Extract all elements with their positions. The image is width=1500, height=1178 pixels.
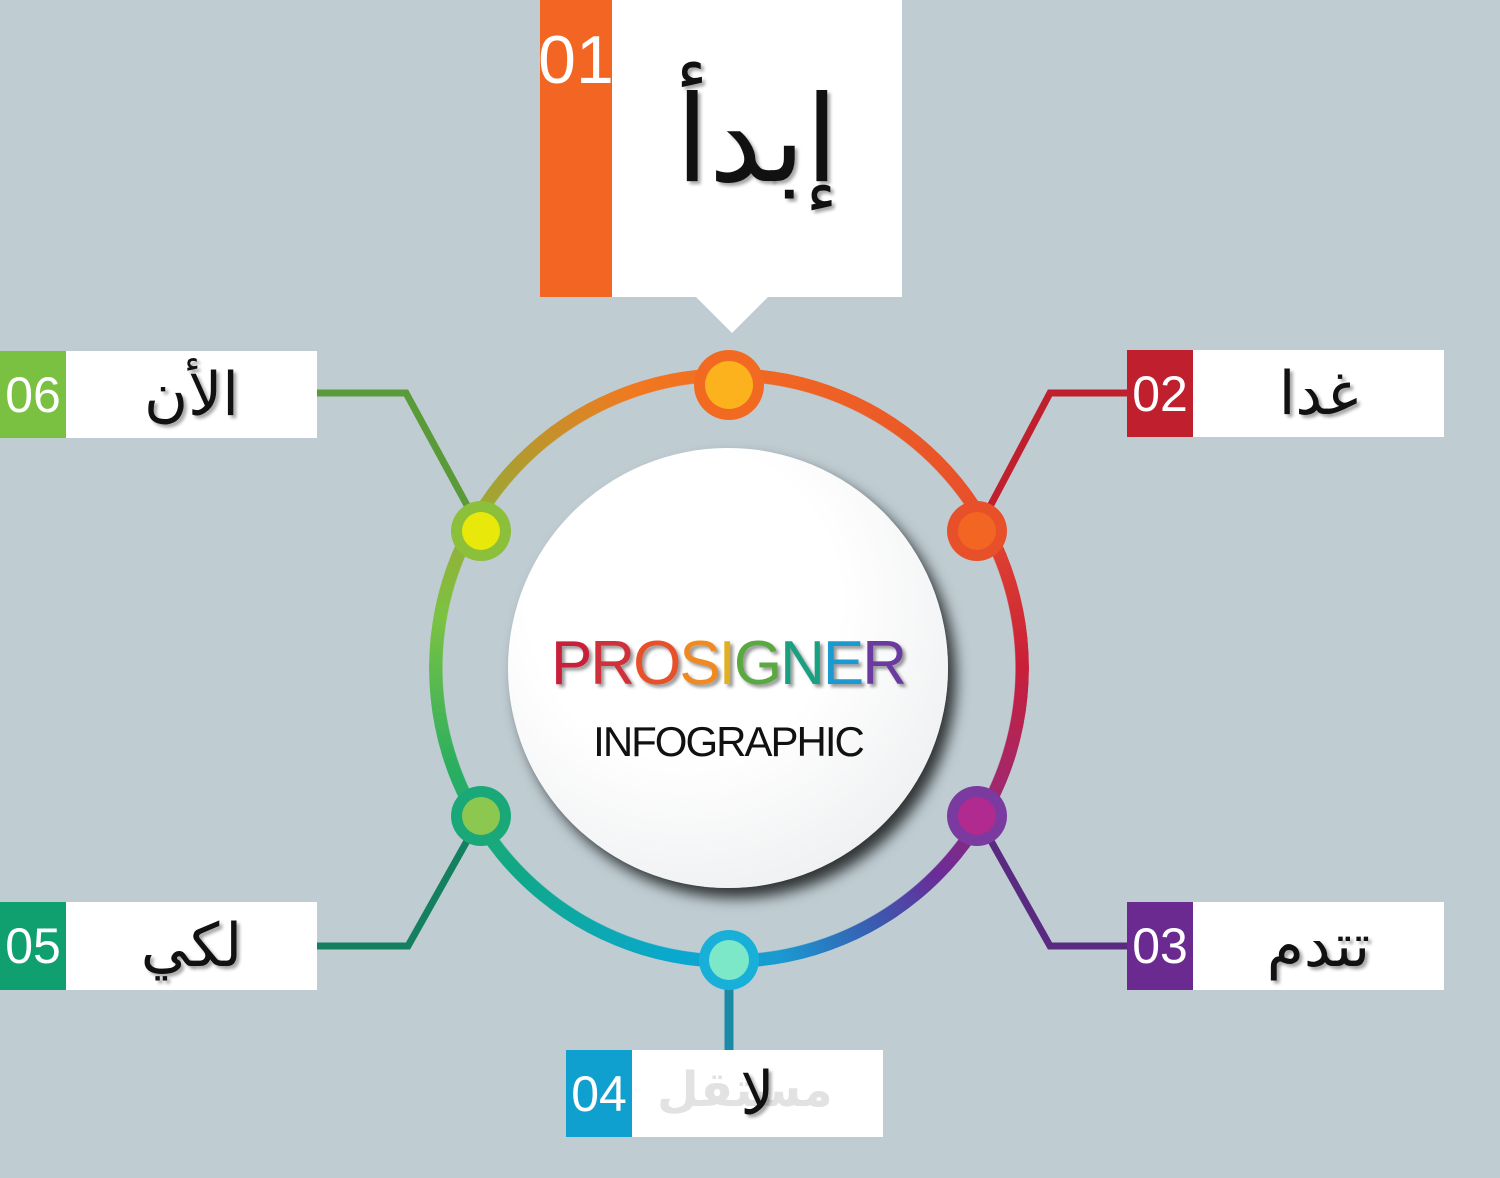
box 04: لا xyxy=(740,1058,775,1128)
box 02: 02 xyxy=(1132,366,1188,422)
box 03: 03 xyxy=(1132,918,1188,974)
dot 02 xyxy=(947,501,1007,561)
number 01: 01 xyxy=(538,22,614,98)
box 05: 05 xyxy=(5,918,61,974)
connector 06 xyxy=(317,393,481,531)
dot 04 xyxy=(699,930,759,990)
box 03: تتدم xyxy=(1267,911,1370,981)
box 06: 06 xyxy=(5,366,61,422)
box 06 xyxy=(0,351,317,438)
word 01: إبدأ xyxy=(675,70,839,210)
box 05: لكي xyxy=(141,911,242,981)
box 06: الأن xyxy=(144,360,239,430)
connector 04 xyxy=(724,960,734,1050)
box 04: مستقل xyxy=(657,1062,833,1118)
box 02 xyxy=(1127,350,1444,437)
subtitle: INFOGRAPHIC: INFOGRAPHIC xyxy=(593,718,863,765)
box 03 xyxy=(1127,902,1444,990)
box 04: 04 xyxy=(571,1066,627,1122)
dot 05 xyxy=(451,786,511,846)
center circle xyxy=(508,448,948,888)
box 04 xyxy=(566,1050,883,1137)
connector 03 xyxy=(977,816,1127,946)
title: PROSIGNER: PROSIGNER xyxy=(551,629,905,698)
dot 03 xyxy=(947,786,1007,846)
dot 01 xyxy=(694,350,764,420)
connector 02 xyxy=(977,393,1127,531)
box 02: غدا xyxy=(1279,358,1358,428)
box 01 xyxy=(538,0,902,333)
connector 05 xyxy=(317,816,481,946)
dot 06 xyxy=(451,501,511,561)
box 05 xyxy=(0,902,317,990)
ring xyxy=(429,368,1029,968)
